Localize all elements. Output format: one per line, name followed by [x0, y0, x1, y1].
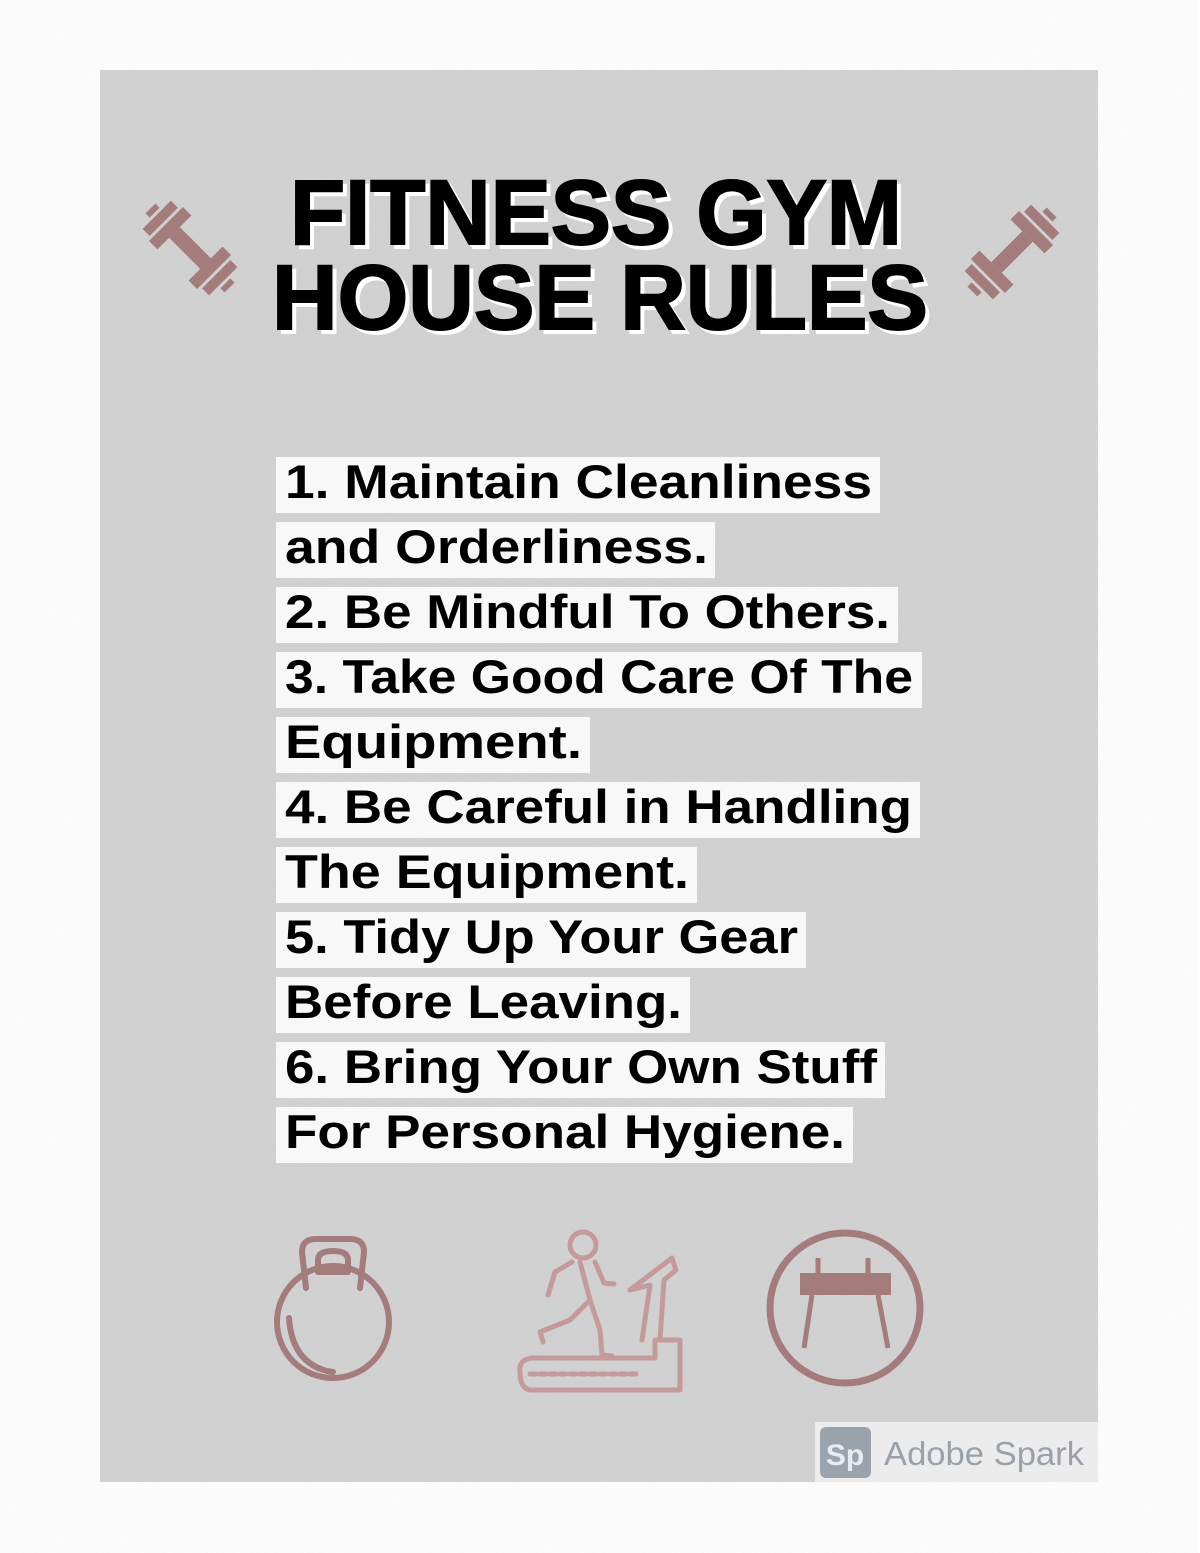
title: FITNESS GYM: [294, 166, 906, 268]
rules list: 5. Tidy Up Your Gear: [285, 910, 798, 963]
badge: Adobe Spark: [815, 1422, 1098, 1482]
title: HOUSE RULES: [276, 251, 932, 353]
icon: left dumbbell: [133, 191, 247, 305]
icon: right dumbbell: [955, 195, 1069, 309]
rules list: The Equipment.: [285, 845, 689, 898]
icon: treadmill runner: [520, 1232, 680, 1390]
rules list: Before Leaving.: [285, 975, 682, 1028]
title: HOUSE RULES: [272, 247, 928, 349]
rules list: 3. Take Good Care Of The: [285, 650, 913, 703]
title: FITNESS GYM: [290, 162, 902, 264]
icon: pommel horse: [770, 1233, 920, 1383]
rules list: For Personal Hygiene.: [285, 1105, 845, 1158]
rules list: Equipment.: [285, 715, 582, 768]
badge: Adobe Spark: Adobe Spark: [884, 1435, 1085, 1472]
rules list: 1. Maintain Cleanliness: [285, 455, 872, 508]
panel: background: [100, 70, 1098, 1482]
title: [272, 162, 932, 353]
icon: kettlebell: [277, 1239, 389, 1378]
rules list: [276, 455, 922, 1163]
badge: Adobe Spark: Sp: [826, 1439, 864, 1472]
rules list: 6. Bring Your Own Stuff: [285, 1040, 877, 1093]
rules list: 4. Be Careful in Handling: [285, 780, 912, 833]
rules list: and Orderliness.: [285, 520, 708, 573]
rules list: 2. Be Mindful To Others.: [285, 585, 890, 638]
